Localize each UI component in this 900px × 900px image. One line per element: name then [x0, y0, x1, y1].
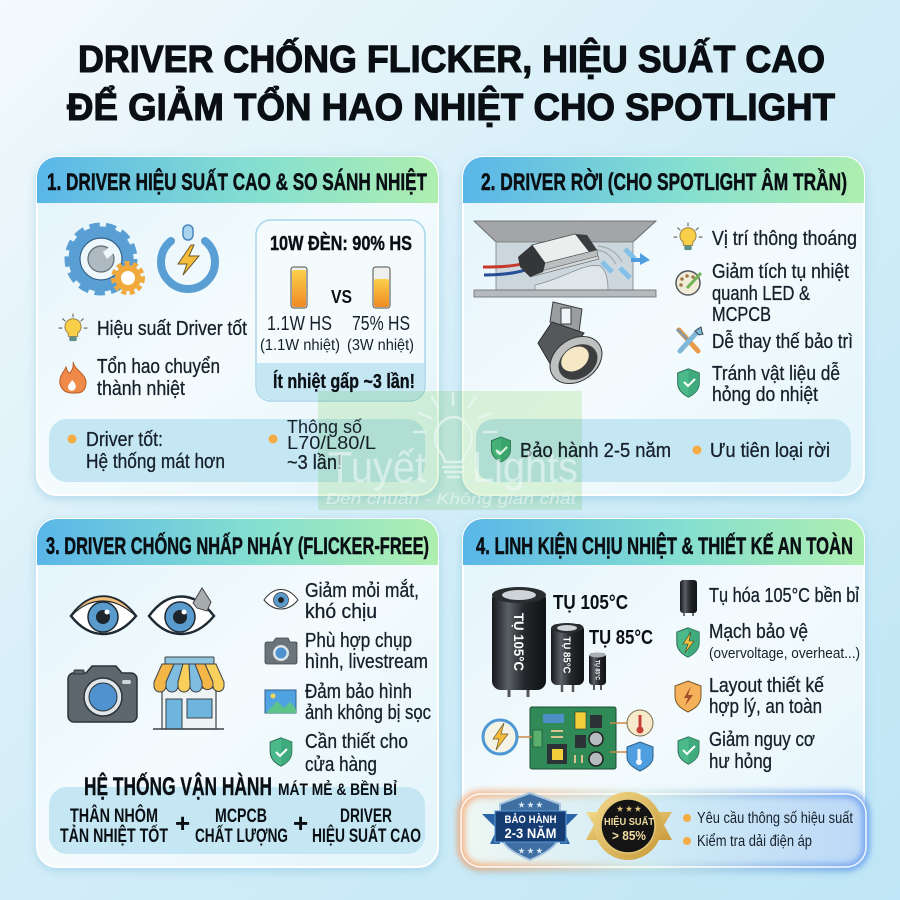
- list: reduce eye strain: khó chịu: [305, 601, 377, 623]
- list: protection circuit: Mạch bảo vệ: [709, 621, 808, 643]
- panel 2 summary strip: Ưu tiên loại rời: [710, 440, 830, 462]
- icon: shield: [270, 738, 292, 766]
- small capacitor: TỤ 85°C: [594, 660, 600, 681]
- summary formula strip: HỆ THỐNG VẬN HÀNH: [84, 771, 272, 801]
- list: protection circuit: [677, 621, 860, 662]
- panel 2 summary strip: [476, 419, 851, 482]
- badge: warranty: [482, 793, 578, 860]
- comparison box: (3W nhiệt): [347, 337, 414, 354]
- panel 1 summary strip: Driver tốt:: [86, 429, 163, 451]
- panel 3 heading: [37, 519, 438, 565]
- panel 1 summary strip: ~3 lần!: [287, 452, 342, 474]
- list: necessary for shops: [270, 731, 408, 776]
- summary formula strip: DRIVER: [340, 806, 392, 827]
- list: avoid heat-damaged materials: hỏng do nhiệt: [712, 384, 818, 406]
- arrow: airflow: [602, 249, 650, 278]
- icon: thermometer: [627, 710, 653, 736]
- icon: power bolt: [161, 225, 215, 289]
- comparison box: VS: [331, 287, 352, 307]
- comparison box: 10W ĐÈN: 90% HS: [270, 232, 412, 255]
- list: layout design: hợp lý, an toàn: [709, 696, 822, 718]
- badge: efficiency seal: [586, 792, 672, 860]
- panel 1 summary strip: Hệ thống mát hơn: [86, 451, 225, 473]
- text: loss becomes heat: thành nhiệt: [97, 378, 185, 400]
- list: reduce failure risk: Giảm nguy cơ: [709, 729, 815, 751]
- icon: tools: [677, 327, 703, 351]
- illustration: driver in ceiling: [474, 221, 656, 297]
- summary formula strip: MÁT MẺ & BỀN BỈ: [278, 780, 397, 799]
- icon: bolt shield: [677, 628, 699, 657]
- label: capacitor 105: TỤ 105°C: [553, 592, 628, 614]
- summary formula strip: +: [293, 808, 308, 838]
- summary formula strip: +: [175, 808, 190, 838]
- capacitor 85: [551, 623, 584, 692]
- panel 1 summary strip: [49, 417, 425, 482]
- list: camera and livestream: hình, livestream: [305, 651, 428, 673]
- icon: capacitor: [680, 580, 697, 616]
- comparison box: [256, 220, 425, 401]
- icon: shield: [678, 369, 699, 397]
- callout bullets: Yêu cầu thông số hiệu suất: [697, 810, 854, 827]
- list: reduce heat buildup: [676, 261, 849, 326]
- text: loss becomes heat: [97, 356, 220, 400]
- list: necessary for shops: cửa hàng: [305, 754, 377, 776]
- summary formula strip: THÂN NHÔM: [70, 805, 158, 827]
- list: avoid heat-damaged materials: Tránh vật liệu dễ: [712, 362, 840, 385]
- list: image without banding: ảnh không bị sọc: [305, 702, 431, 724]
- badge: warranty: ★ ★ ★: [518, 847, 543, 855]
- label: capacitor 85: TỤ 85°C: [589, 627, 653, 649]
- list: reduce heat buildup: MCPCB: [712, 304, 771, 326]
- list: protection circuit: (overvoltage, overheat...): [709, 645, 860, 662]
- panel 2 summary strip: Bảo hành 2-5 năm: [520, 440, 671, 462]
- panel 1 summary strip: L70/L80/L: [287, 433, 376, 453]
- list: reduce heat buildup: quanh LED &: [712, 283, 811, 305]
- list: ventilated position: [674, 223, 857, 250]
- badge: warranty: BẢO HÀNH: [504, 813, 557, 826]
- icon: camera: [265, 638, 297, 664]
- icon: storefront: [153, 657, 224, 729]
- title: [67, 36, 835, 129]
- title: DRIVER CHỐNG FLICKER, HIỆU SUẤT CAO: [78, 36, 825, 81]
- watermark: Tuyết: [328, 443, 426, 492]
- list: 105C capacitor: Tụ hóa 105°C bền bỉ: [709, 585, 859, 607]
- bar: 75 percent tube: [373, 267, 390, 308]
- panel 2: separate driver: [463, 157, 864, 495]
- comparison box: 1.1W HS: [267, 313, 332, 335]
- panel 3 heading: 3. DRIVER CHỐNG NHẤP NHÁY (FLICKER-FREE): [46, 532, 429, 560]
- watermark: Lights: [472, 443, 578, 492]
- icon: eye: [264, 590, 298, 609]
- small capacitor: [589, 652, 606, 690]
- bar: 90 percent tube: [291, 267, 307, 308]
- comparison box: Ít nhiệt gấp ~3 lần!: [273, 370, 415, 393]
- panel 1 heading: 1. DRIVER HIỆU SUẤT CAO & SO SÁNH NHIỆT: [47, 168, 427, 196]
- badge: efficiency seal: HIỆU SUẤT: [604, 815, 655, 828]
- list: camera and livestream: [265, 630, 428, 673]
- badge: efficiency seal: > 85%: [612, 828, 646, 843]
- panel 3: flicker-free driver: [37, 519, 438, 867]
- capacitor 105: TỤ 105°C: [511, 613, 527, 671]
- panel 2 heading: [463, 157, 864, 203]
- icon: gears with wrench: [68, 226, 143, 293]
- comparison box: 75% HS: [352, 313, 410, 335]
- list: ventilated position: Vị trí thông thoáng: [712, 228, 857, 250]
- panel 4: heat-resistant components: [463, 519, 864, 867]
- icon: shield: [491, 437, 511, 462]
- badge: warranty: ★ ★ ★: [518, 801, 543, 809]
- list: image without banding: [265, 681, 431, 724]
- summary formula strip: HIỆU SUẤT CAO: [312, 825, 421, 847]
- list: easy maintenance: Dễ thay thế bảo trì: [712, 330, 853, 353]
- watermark: Đèn chuẩn - Không gian chất: [326, 490, 577, 508]
- capacitor 105: [492, 587, 546, 697]
- icon: tired eye: [149, 588, 214, 634]
- list: image without banding: Đảm bảo hình: [305, 681, 412, 703]
- text: loss becomes heat: Tổn hao chuyển: [97, 356, 220, 378]
- callout bullets: Kiểm tra dải điện áp: [697, 833, 812, 850]
- panel 1: high-efficiency driver: [37, 157, 438, 495]
- icon: gauge: [676, 271, 701, 295]
- icon: bolt circle: [483, 720, 517, 754]
- list: reduce heat buildup: Giảm tích tụ nhiệt: [712, 261, 849, 283]
- illustration: circuit board: [518, 707, 628, 769]
- icon: thermometer shield: [627, 742, 653, 771]
- summary formula strip: [49, 771, 425, 854]
- list: layout design: Layout thiết kế: [709, 675, 824, 697]
- list: reduce eye strain: [264, 579, 419, 623]
- summary formula strip: MCPCB: [215, 806, 267, 827]
- icon: camera: [68, 666, 137, 722]
- list: reduce eye strain: Giảm mỏi mắt,: [305, 579, 419, 602]
- summary formula strip: CHẤT LƯỢNG: [195, 825, 288, 847]
- callout bullets: [683, 810, 854, 850]
- panel 1 heading: [37, 157, 438, 203]
- capacitor 85: TỤ 85°C: [560, 636, 572, 674]
- illustration: spotlight: [538, 302, 611, 393]
- list: 105C capacitor: [680, 580, 859, 616]
- icon: bulb: [59, 314, 87, 341]
- comparison box: (1.1W nhiệt): [260, 337, 340, 354]
- list: necessary for shops: Cần thiết cho: [305, 731, 408, 753]
- watermark: [318, 391, 582, 510]
- list: layout design: [675, 675, 824, 718]
- icon: flame: [60, 362, 86, 393]
- icon: picture: [265, 690, 296, 713]
- list: camera and livestream: Phù hợp chụp: [305, 630, 412, 652]
- title: ĐỂ GIẢM TỔN HAO NHIỆT CHO SPOTLIGHT: [67, 84, 835, 129]
- panel 4 heading: [463, 519, 864, 565]
- summary formula strip: TẢN NHIỆT TỐT: [60, 825, 168, 847]
- list: avoid heat-damaged materials: [678, 362, 840, 406]
- icon: relaxed eye: [71, 596, 136, 634]
- list: reduce failure risk: hư hỏng: [709, 751, 772, 773]
- glowing callout: [461, 792, 866, 867]
- badge: warranty: 2-3 NĂM: [504, 825, 556, 841]
- list: easy maintenance: [677, 327, 853, 353]
- icon: shield: [678, 737, 699, 764]
- text: driver efficiency: Hiệu suất Driver tốt: [97, 318, 247, 340]
- list: reduce failure risk: [678, 729, 815, 773]
- icon: orange shield: [675, 681, 701, 712]
- icon: bulb: [674, 223, 702, 250]
- badge: efficiency seal: ★ ★ ★: [617, 805, 641, 813]
- panel 1 summary strip: Thông số: [287, 417, 362, 437]
